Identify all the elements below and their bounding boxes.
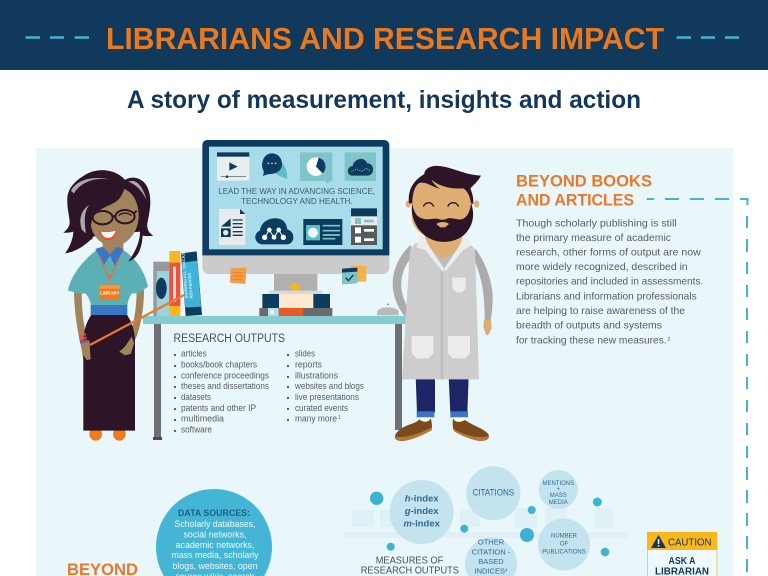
book stack: [259, 291, 332, 316]
text block: beyond books and articles: 2: [668, 337, 670, 343]
icon: document: [219, 209, 245, 245]
desk: [143, 316, 406, 440]
bubble: mentions and mass media: MASS: [550, 493, 567, 499]
list: research outputs: datasets: [181, 392, 211, 402]
man head: [406, 166, 481, 272]
bubble: data sources: academic networks,: [176, 540, 254, 551]
list: research outputs: theses and dissertations: [181, 381, 269, 391]
text block: beyond books and articles: breadth of outputs and systems: [516, 320, 662, 332]
text block: beyond books and articles: for tracking these new measures.: [516, 334, 667, 346]
list: research outputs: multimedia: [181, 414, 224, 424]
illustration: librarian woman: LIBRARY: [100, 291, 119, 296]
books on desk: RED PEPPER: [187, 273, 194, 299]
fringe: [71, 170, 125, 243]
screen message: LEAD THE WAY IN ADVANCING SCIENCE,: [218, 186, 375, 196]
subtitle: A story of measurement, insights and action: [127, 86, 641, 114]
bubble: number of publications: OF: [560, 542, 568, 548]
computer monitor: [202, 140, 399, 316]
bubble: mentions and mass media: [539, 470, 578, 509]
arms: [74, 290, 91, 360]
monitor chin: [202, 253, 389, 274]
woman head: [63, 170, 153, 284]
list: research outputs: software: [181, 424, 212, 434]
belt: [91, 305, 127, 315]
screen: [209, 147, 383, 249]
bubble: citations: CITATIONS: [472, 488, 514, 498]
pointer stick: [90, 295, 184, 345]
icon: video player: [217, 152, 249, 181]
bubble: other citation-based indices: [465, 538, 517, 576]
back hair: [63, 170, 153, 262]
bubble: other citation-based indices: OTHER: [478, 538, 505, 546]
icon: cloud network: [345, 152, 376, 181]
gray hair streaks: [71, 178, 147, 233]
collar: [416, 234, 472, 272]
list: research outputs: 1: [338, 415, 341, 421]
main panel background: [36, 148, 733, 576]
screen message: TECHNOLOGY AND HEALTH.: [241, 196, 353, 206]
list: research outputs: [174, 333, 364, 434]
neck: [103, 240, 123, 253]
bubble: other citation-based indices: INDICES: [475, 566, 505, 576]
list: research outputs: books/book chapters: [181, 360, 257, 370]
icon: speech bubbles: [262, 153, 287, 179]
badge: [100, 285, 120, 300]
icon: pie chart: [300, 152, 332, 184]
screen message: [218, 186, 375, 206]
bubble: data sources: mass media, scholarly: [172, 550, 259, 561]
bubble chart title: [361, 555, 459, 576]
arms: [393, 245, 413, 317]
title: LIBRARIANS AND RESEARCH IMPACT: [106, 21, 664, 56]
icon: warning triangle: [651, 535, 666, 548]
bubble: other citation-based indices: 4: [505, 568, 508, 572]
faint background shelf: [343, 508, 628, 538]
bracelets: [79, 334, 87, 339]
list: research outputs: RESEARCH OUTPUTS: [174, 333, 285, 345]
bubble: other citation-based indices: BASED: [478, 557, 504, 566]
bubble chart: measures of research outputs: [361, 466, 609, 576]
hands over skirt: [83, 340, 91, 360]
dashed connector: [647, 199, 748, 572]
calendar note: [342, 266, 366, 284]
feet and trousers: [395, 377, 489, 441]
sticky note: [230, 267, 247, 284]
list: research outputs: illustrations: [295, 370, 338, 380]
shirt: [68, 250, 148, 306]
bubble: h-index: [390, 480, 454, 544]
bubble: mentions and mass media: +: [557, 486, 561, 492]
bubble: other citation-based indices: CITATION -: [472, 548, 511, 556]
neck fill and lapel V: [425, 232, 463, 272]
list: research outputs: live presentations: [295, 392, 359, 402]
monitor frame: [202, 140, 389, 255]
bubble: data sources: [156, 489, 272, 576]
face: [412, 181, 472, 240]
text block: beyond books and articles: Though scholarly publishing is still: [516, 218, 677, 230]
glasses: [93, 210, 137, 224]
text block: beyond books and articles: AND ARTICLES: [516, 192, 634, 210]
books on desk: SHOWING ALL TRACKS: [180, 252, 189, 299]
icon: Mendeley cloud: [255, 218, 293, 244]
caution box: CAUTION: [668, 537, 712, 548]
books on desk: [153, 251, 202, 316]
shoes: [89, 427, 102, 441]
nose: [436, 222, 449, 227]
text block: beyond books and articles: research, other forms of output are now: [516, 247, 701, 259]
coat: [402, 240, 479, 379]
list: research outputs: many more: [295, 414, 337, 424]
face: [91, 188, 139, 246]
text block: beyond books and articles: the primary measure of academic: [516, 232, 671, 244]
text block: beyond books and articles: BEYOND BOOKS: [516, 173, 652, 191]
list: research outputs: patents and other IP: [181, 403, 256, 413]
ears: [406, 200, 411, 208]
icon: dashboard: [351, 208, 377, 245]
bubble chart title: MEASURES OF: [376, 555, 443, 567]
text block: beyond books and articles: repositories and included in assessments.: [516, 276, 703, 288]
list: research outputs: websites and blogs: [294, 381, 364, 391]
smile: [99, 229, 117, 240]
bubble: data sources: blogs, websites, open: [172, 561, 258, 572]
list: research outputs: curated events: [295, 403, 348, 413]
desk bell: [377, 303, 399, 315]
text block: beyond books and articles: more widely recognized, described in: [516, 261, 688, 273]
text block: beyond books and articles: are helping to raise awareness of the: [516, 305, 685, 317]
text block: beyond books and articles: Librarians and information professionals: [516, 291, 697, 303]
illustration: librarian woman: [63, 170, 153, 441]
caution box: [647, 532, 717, 576]
list: research outputs: conference proceedings: [181, 370, 269, 380]
hair: [409, 166, 481, 204]
eyes smile: [423, 203, 459, 207]
bubble: data sources: social networks,: [184, 530, 246, 540]
beard: [412, 203, 473, 242]
bubble: h-index: g-index: [404, 506, 439, 517]
text block: beyond books and articles: [516, 173, 703, 346]
bubble: data sources: Scholarly databases,: [174, 519, 256, 530]
header banner: [0, 0, 768, 70]
bubble: data sources: DATA SOURCES:: [178, 508, 250, 519]
list: research outputs: articles: [181, 348, 207, 358]
bubble: mentions and mass media: MEDIA: [549, 500, 568, 506]
bubble: number of publications: [538, 518, 590, 570]
pockets: [452, 278, 466, 292]
caution box: ASK A: [668, 555, 696, 567]
skirt: [83, 314, 135, 431]
collar: [95, 247, 123, 267]
lanyard: [99, 257, 119, 279]
bubble: h-index: h-index: [405, 494, 439, 505]
bubble: number of publications: NUMBER: [551, 534, 578, 540]
stand: [274, 273, 317, 292]
bubble: number of publications: PUBLICATIONS: [542, 550, 586, 556]
icon: profile card: [303, 219, 342, 245]
list: research outputs: reports: [295, 360, 322, 370]
bubble: h-index: m-index: [403, 518, 441, 529]
bubble: citations: [466, 466, 520, 520]
illustration: researcher man: [393, 166, 493, 441]
list: research outputs: slides: [295, 348, 315, 358]
bubble: mentions and mass media: MENTIONS: [542, 481, 574, 487]
